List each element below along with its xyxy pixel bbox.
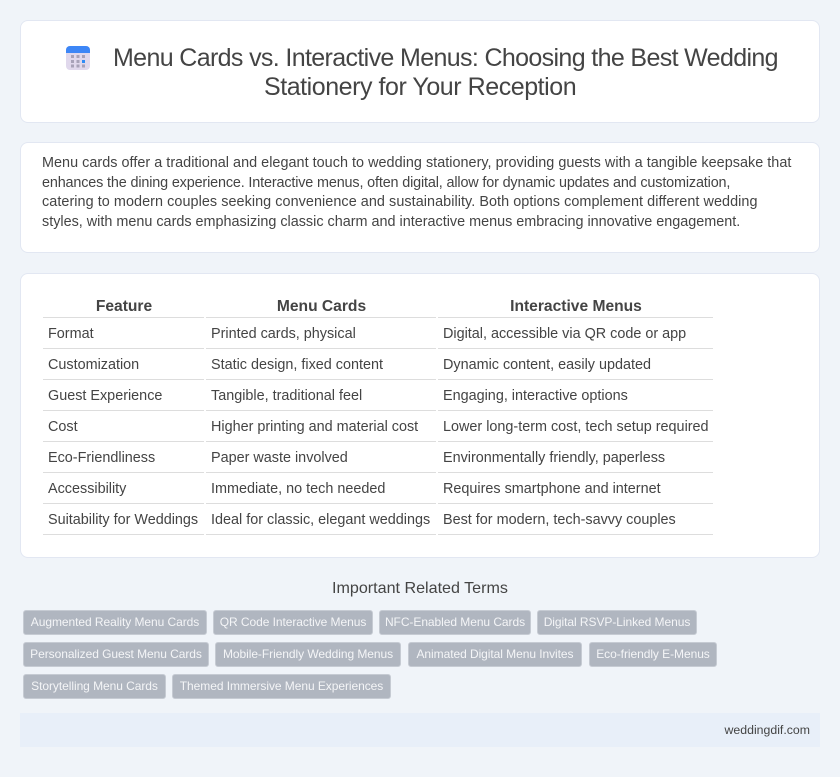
row: Customization: Customization: [48, 357, 139, 373]
tag: [589, 642, 717, 667]
row: Accessibility: [43, 472, 713, 497]
tag: [23, 610, 207, 635]
row: Eco-Friendliness: [43, 441, 713, 466]
row: Eco-Friendliness: Eco-Friendliness: [48, 450, 155, 466]
row: Eco-Friendliness: Environmentally friendly, paperless: [443, 450, 665, 466]
tag: [23, 674, 166, 699]
row: Accessibility: Requires smartphone and internet: [443, 481, 661, 497]
row: Format: Format: [48, 326, 94, 342]
table header: Menu Cards: [277, 298, 366, 315]
footer bar: [20, 713, 820, 747]
tag: QR Code Interactive Menus: [220, 615, 366, 629]
text block: introduction: styles, with menu cards emphasizing classic charm and interactive menus embracing innovative engagement.: [42, 214, 740, 230]
row: Cost: Cost: [48, 419, 78, 435]
row: Cost: Higher printing and material cost: [211, 419, 418, 435]
tag: NFC-Enabled Menu Cards: [385, 615, 525, 629]
row: Format: Printed cards, physical: [211, 326, 356, 342]
tag: [408, 642, 582, 667]
row: Customization: Static design, fixed content: [211, 357, 383, 373]
tag: Eco-friendly E-Menus: [596, 647, 710, 661]
row: Customization: Dynamic content, easily updated: [443, 357, 651, 373]
title: [113, 44, 778, 101]
table header: Feature: [96, 298, 152, 315]
row: Accessibility: Immediate, no tech needed: [211, 481, 385, 497]
row: Guest Experience: [43, 379, 713, 404]
tag: Digital RSVP-Linked Menus: [544, 615, 690, 629]
tag: [172, 674, 391, 699]
row: Accessibility: Accessibility: [48, 481, 126, 497]
text block: introduction: [42, 155, 792, 230]
tag: Storytelling Menu Cards: [31, 679, 158, 693]
tag: Themed Immersive Menu Experiences: [180, 679, 383, 693]
row: Eco-Friendliness: Paper waste involved: [211, 450, 348, 466]
row: Cost: [43, 410, 713, 435]
row: Format: Digital, accessible via QR code or app: [443, 326, 686, 342]
row: Guest Experience: Guest Experience: [48, 388, 162, 404]
tag: [213, 610, 373, 635]
row: Suitability for Weddings: Best for modern, tech-savvy couples: [443, 512, 676, 528]
tag: [215, 642, 401, 667]
table header: [96, 298, 642, 315]
row: Format: [43, 317, 713, 342]
title: Stationery for Your Reception: [264, 73, 576, 101]
tag: Personalized Guest Menu Cards: [30, 647, 202, 661]
tag list: related terms: [23, 610, 717, 699]
text block: introduction: enhances the dining experience. Interactive menus, often digital, allow for dynamic updates and customization,: [42, 175, 730, 191]
row: Customization: [43, 348, 713, 373]
title: Menu Cards vs. Interactive Menus: Choosing the Best Wedding: [113, 44, 778, 72]
heading: related terms: Important Related Terms: [332, 579, 508, 597]
footer source: weddingdif.com: [725, 723, 810, 737]
tag: [23, 642, 209, 667]
table header: Interactive Menus: [510, 298, 642, 315]
row: Guest Experience: Engaging, interactive options: [443, 388, 628, 404]
row: Suitability for Weddings: [43, 503, 713, 535]
row: Guest Experience: Tangible, traditional feel: [211, 388, 362, 404]
tag: [537, 610, 697, 635]
panel: title header: [20, 20, 820, 123]
row: Suitability for Weddings: Suitability for Weddings: [48, 512, 198, 528]
tag: Augmented Reality Menu Cards: [31, 615, 199, 629]
panel: comparison table: [20, 273, 820, 558]
tag: [379, 610, 531, 635]
tag: Mobile-Friendly Wedding Menus: [223, 647, 393, 661]
row: Suitability for Weddings: Ideal for classic, elegant weddings: [211, 512, 430, 528]
tag: Animated Digital Menu Invites: [416, 647, 574, 661]
icon: calendar: [66, 46, 90, 70]
row: Cost: Lower long-term cost, tech setup required: [443, 419, 709, 435]
text block: introduction: catering to modern couples seeking convenience and sustainability. Both options complement different wedding: [42, 194, 758, 210]
text block: introduction: Menu cards offer a traditional and elegant touch to wedding stationery, providing guests with a tangible keepsake that: [42, 155, 791, 171]
panel: introduction: [20, 142, 820, 253]
